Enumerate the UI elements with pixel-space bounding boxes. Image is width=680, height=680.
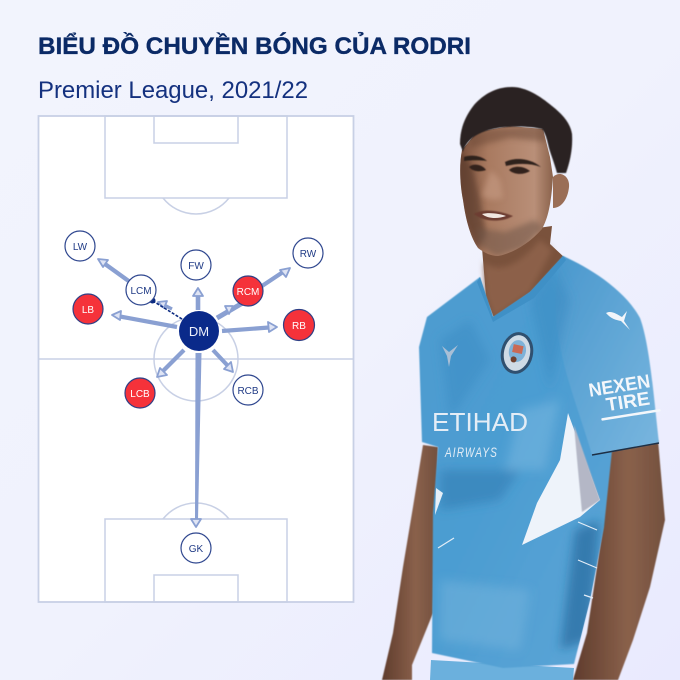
neck xyxy=(481,226,565,318)
node: LCM xyxy=(126,275,156,305)
nose xyxy=(482,173,502,200)
player photo illustration xyxy=(382,87,665,680)
subtitle: Premier League, 2021/22 xyxy=(38,77,308,104)
node: DM: DM xyxy=(189,324,209,339)
arrow: dashed return pass LCM to DM xyxy=(150,298,182,319)
left waist white flash xyxy=(435,488,443,515)
left arm xyxy=(382,445,438,680)
node: RW xyxy=(293,238,323,268)
eyes xyxy=(469,165,530,174)
node: GK xyxy=(181,533,211,563)
forehead shadow xyxy=(470,125,548,148)
node: LW xyxy=(65,231,95,261)
node: RCB xyxy=(233,375,263,405)
arrow: DM to RCM xyxy=(217,301,246,318)
sponsor: Etihad Airways: ETIHAD xyxy=(432,407,528,437)
hair xyxy=(460,87,572,173)
panel: football pitch xyxy=(38,116,354,602)
eyebrows xyxy=(464,156,541,167)
arrow: DM to GK xyxy=(191,353,202,527)
node: LW: LW xyxy=(73,242,88,253)
pass arrows xyxy=(98,259,290,527)
club badge xyxy=(499,331,535,375)
puma logo: sleeve xyxy=(606,311,630,330)
node: RCB: RCB xyxy=(237,386,259,397)
arrow: DM to LCM xyxy=(158,301,172,309)
mouth xyxy=(474,211,513,221)
node: LB xyxy=(73,294,103,324)
stubble xyxy=(477,220,543,256)
shirt fold highlights xyxy=(438,522,597,598)
face xyxy=(460,126,553,256)
title: BIỂU ĐỒ CHUYỀN BÓNG CỦA RODRI xyxy=(38,31,471,60)
node: FW: FW xyxy=(188,261,204,272)
node: LCB: LCB xyxy=(130,389,150,400)
sponsor: Etihad Airways: AIRWAYS xyxy=(444,444,498,460)
sleeve hem xyxy=(592,443,659,455)
node: RCM xyxy=(233,276,263,306)
player nodes xyxy=(65,231,323,563)
node: GK: GK xyxy=(189,544,204,555)
puma logo: chest xyxy=(442,345,458,367)
face features xyxy=(458,125,548,256)
node: LB: LB xyxy=(82,305,94,316)
arrow: RCM to RW xyxy=(262,268,290,286)
node: RCM: RCM xyxy=(237,287,259,298)
pitch surface xyxy=(38,116,354,602)
sleeve sponsor: Nexen Tire: TIRE xyxy=(605,389,651,416)
arrow: DM to LCB xyxy=(157,350,184,377)
shirt torso xyxy=(419,256,627,668)
arrow: DM to RB xyxy=(222,322,277,332)
node: LCM: LCM xyxy=(130,286,152,297)
shirt sleeve xyxy=(556,256,659,455)
node: RW: RW xyxy=(300,249,317,260)
node: RB xyxy=(284,310,314,340)
node: LCB xyxy=(125,378,155,408)
arrow: DM to RCB xyxy=(213,350,233,372)
node: FW xyxy=(181,250,211,280)
sponsor: Etihad Airways xyxy=(432,407,528,460)
face shadow xyxy=(458,150,486,250)
ear xyxy=(553,174,569,208)
arrow: LCM to LW xyxy=(98,259,130,282)
collar xyxy=(477,256,566,322)
shirt shading xyxy=(440,262,600,650)
white side panel xyxy=(522,413,600,545)
sleeve sponsor: Nexen Tire: NEXEN xyxy=(587,371,652,402)
node: RB: RB xyxy=(292,321,306,332)
right arm xyxy=(573,440,665,680)
arrow: DM to LB xyxy=(112,311,177,327)
sleeve sponsor: Nexen Tire xyxy=(587,370,661,422)
node: DM xyxy=(179,311,219,351)
shorts xyxy=(430,660,574,680)
arrow: DM to FW xyxy=(193,288,203,310)
